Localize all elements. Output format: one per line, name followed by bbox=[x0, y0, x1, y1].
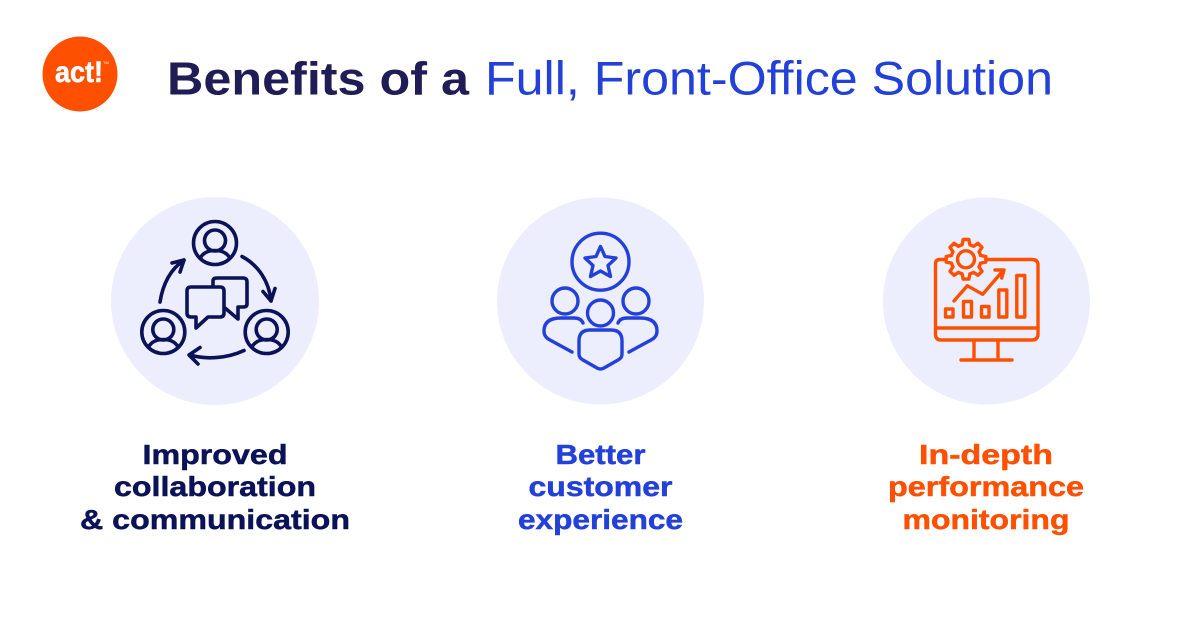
title bbox=[167, 51, 1053, 104]
icon: customers with star bbox=[497, 198, 704, 404]
label: improved collaboration bbox=[80, 439, 350, 535]
panel: collaboration bbox=[80, 197, 350, 535]
panel: performance monitoring bbox=[883, 198, 1090, 535]
logo: act!: act! bbox=[55, 56, 103, 89]
icon: people collaborating bbox=[111, 197, 319, 405]
label: better customer experience: customer bbox=[528, 471, 673, 502]
logo: act!: TM bbox=[103, 60, 109, 65]
label: better customer experience: Better bbox=[556, 439, 646, 470]
label: in-depth performance monitoring bbox=[888, 439, 1084, 535]
icon: monitor with chart and gear bbox=[883, 198, 1090, 404]
logo: act! bbox=[42, 36, 118, 112]
label: improved collaboration: Improved bbox=[142, 439, 288, 470]
title: Benefits of a bbox=[167, 52, 470, 104]
label: better customer experience bbox=[518, 439, 683, 535]
label: better customer experience: experience bbox=[518, 504, 683, 535]
label: improved collaboration: & communication bbox=[80, 504, 350, 535]
label: in-depth performance monitoring: monitoring bbox=[902, 504, 1070, 535]
title: Full, Front-Office Solution bbox=[485, 51, 1053, 104]
label: in-depth performance monitoring: In-depth bbox=[919, 439, 1053, 470]
label: in-depth performance monitoring: performance bbox=[888, 471, 1084, 502]
label: improved collaboration: collaboration bbox=[114, 471, 316, 502]
panel: customer experience bbox=[497, 198, 704, 535]
